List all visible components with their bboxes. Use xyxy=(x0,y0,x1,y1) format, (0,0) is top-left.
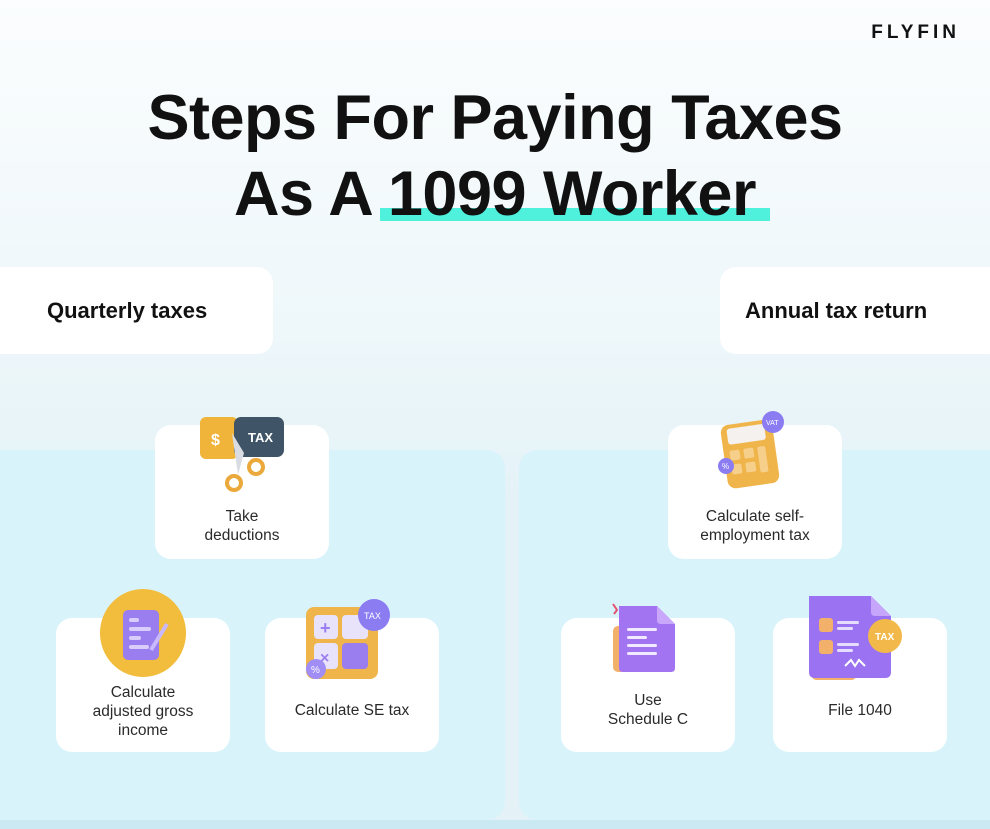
icon: calculator vat xyxy=(718,411,784,488)
card: use schedule C: Schedule C xyxy=(608,711,688,728)
card: calculate adjusted gross income xyxy=(56,618,230,752)
title xyxy=(147,83,843,229)
card: calculate adjusted gross income: adjusted gross xyxy=(93,703,193,720)
pill: annual tax return xyxy=(720,267,990,354)
icon: calculator tax: % xyxy=(311,665,320,676)
icon: calculator tax: + xyxy=(320,618,331,638)
icon: calculator vat: VAT xyxy=(766,420,779,427)
icon: calculator vat: % xyxy=(722,462,729,471)
title: 1099 Worker xyxy=(388,159,756,229)
card: take deductions: Take xyxy=(226,508,258,525)
title: As A xyxy=(234,159,371,229)
pill: quarterly taxes: Quarterly taxes xyxy=(47,298,207,322)
card: use schedule C: Use xyxy=(634,692,662,709)
panel: quarterly xyxy=(0,450,505,820)
icon: calculator tax: TAX xyxy=(364,611,381,621)
icon: calculator tax: × xyxy=(320,650,329,667)
card: file 1040: File 1040 xyxy=(828,702,892,719)
card: calculate self-employment tax: employment tax xyxy=(700,527,810,544)
card: file 1040 xyxy=(773,618,947,752)
pill: quarterly taxes xyxy=(0,267,273,354)
icon: scissors tax: $ xyxy=(211,432,220,449)
bottom band xyxy=(0,820,990,829)
icon: tax form: TAX xyxy=(875,632,895,643)
panel: annual xyxy=(519,450,990,820)
card: use schedule C xyxy=(561,618,735,752)
title: Steps For Paying Taxes xyxy=(147,83,843,153)
card: take deductions: deductions xyxy=(204,527,279,544)
icon: scissors tax: TAX xyxy=(248,430,273,445)
card: calculate adjusted gross income: Calculate xyxy=(111,684,175,701)
card: calculate SE tax: Calculate SE tax xyxy=(295,702,409,719)
card: calculate adjusted gross income: income xyxy=(118,722,168,739)
card: calculate self-employment tax: Calculate self- xyxy=(706,508,804,525)
icon: tax form xyxy=(809,596,902,680)
icon: schedule document xyxy=(612,604,675,672)
card: calculate SE tax xyxy=(265,618,439,752)
icon: scissors tax xyxy=(200,417,284,492)
card: calculate self-employment tax xyxy=(668,425,842,559)
icon: calculator tax xyxy=(306,599,390,679)
pill: annual tax return: Annual tax return xyxy=(745,298,927,322)
icon: document coin xyxy=(100,589,186,677)
logo: FLYFIN xyxy=(871,22,960,43)
card: take deductions xyxy=(155,425,329,559)
